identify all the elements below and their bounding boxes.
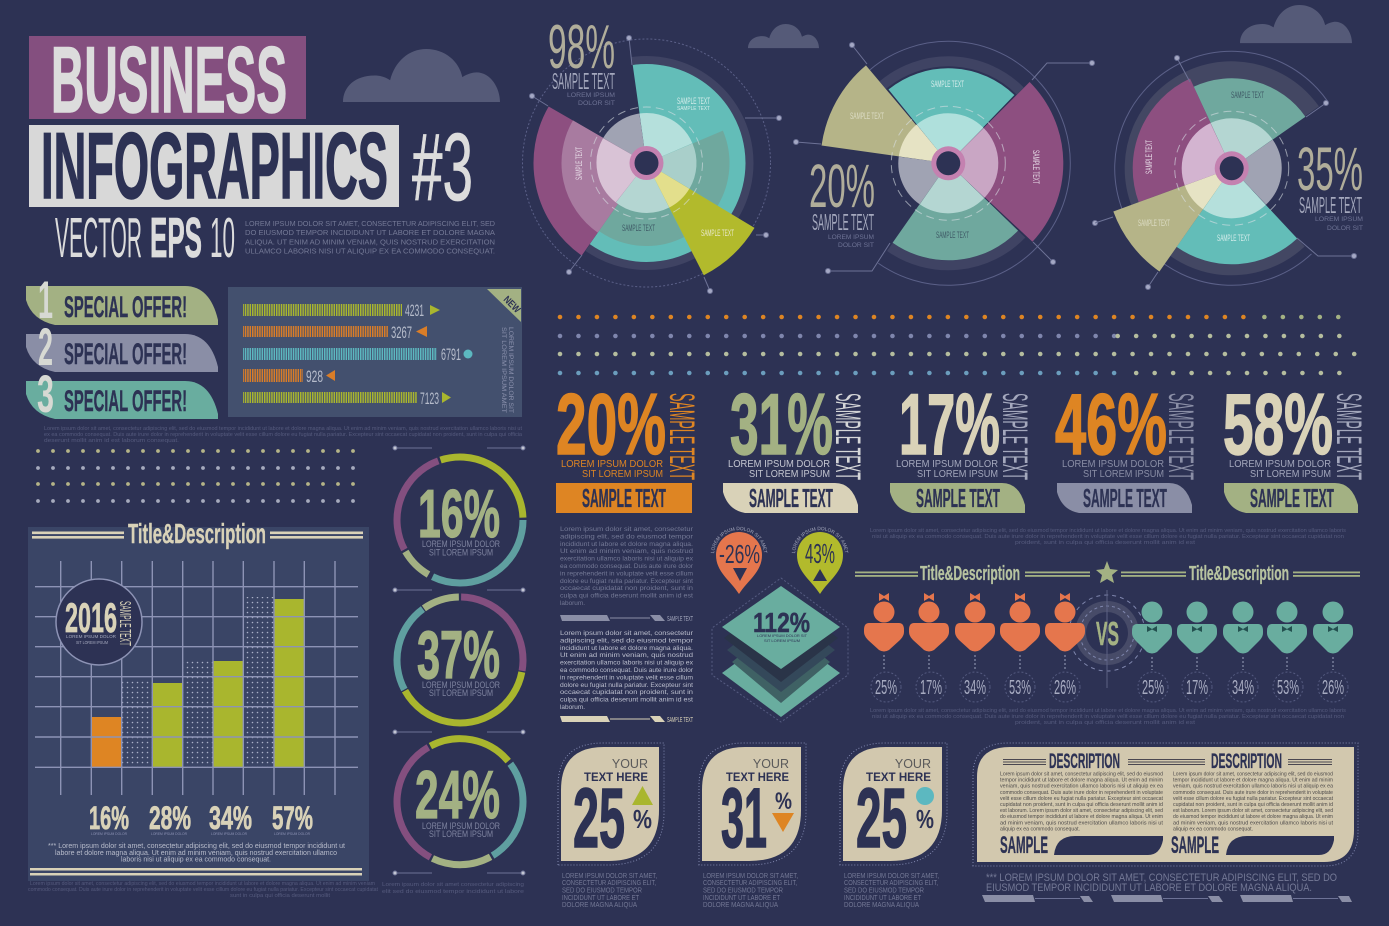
- paragraph block 1: occaecat cupidatat non proident, sunt in: [560, 585, 694, 592]
- offer 3: 3: [37, 365, 54, 424]
- intro text: DO EIUSMOD TEMPOR INCIDIDUNT UT LABORE ET DOLORE MAGNA: [245, 230, 495, 237]
- caption card 3: [844, 873, 939, 909]
- figure 1: [864, 593, 904, 652]
- card 25% triangle: [558, 743, 664, 865]
- text: SAMPLE TEXT: [1329, 393, 1368, 480]
- paragraph block 2: culpa qui officia deserunt mollit anim id est: [560, 697, 693, 704]
- stat 20%: SIT LOREM IPSUM: [582, 469, 663, 480]
- year badge: 2016: [65, 594, 117, 641]
- bar 4231: 4231: [405, 301, 424, 320]
- pie 1 headline: LOREM IPSUM: [567, 92, 615, 99]
- special offers list: [26, 271, 218, 424]
- new corner badge: [487, 289, 522, 322]
- caption under stats: [870, 528, 1347, 546]
- ring chart 16%: SIT LOREM IPSUM: [429, 548, 493, 558]
- text: SAMPLE TEXT: [995, 393, 1034, 480]
- pie chart 35%: [1066, 3, 1389, 334]
- caption card 2: LOREM IPSUM DOLOR SIT AMET,: [703, 873, 798, 880]
- stat 31%: SIT LOREM IPSUM: [749, 469, 830, 480]
- caption card 2: DOLORE MAGNA ALIQUA: [703, 902, 778, 909]
- figure percentages: 34%: [964, 677, 986, 699]
- figure 10: [1313, 602, 1353, 654]
- year badge: SAMPLE TEXT: [116, 601, 133, 646]
- caption card 1: [562, 873, 657, 909]
- paragraph block 2: dolore eu fugiat nulla pariatur. Excepteur sint: [560, 682, 693, 689]
- pie 1 segment labels: SAMPLE TEXT: [574, 147, 584, 180]
- dot grid left: [38, 451, 365, 501]
- bar 7123: 7123: [420, 389, 439, 408]
- versus heading: Title&Description: [920, 563, 1020, 585]
- pie 3 segment labels: SAMPLE TEXT: [1138, 218, 1170, 228]
- percent labels: [89, 800, 313, 836]
- pie 3 headline: DOLOR SIT: [1327, 225, 1363, 232]
- caption under offers: Lorem ipsum dolor sit amet, consectetur adipiscing elit, sed do eiusmod tempor incididunt ut labore et dolore magna aliqua. Ut enim ad minim veniam, quis nostrud exercitation ullamco laboris nisi ut: [44, 426, 523, 432]
- percent sublabels: LOREM IPSUM DOLOR: [151, 832, 187, 836]
- description column 1: Lorem ipsum dolor sit amet, consectetur adipiscing elit, sed do eiusmod: [1000, 772, 1163, 778]
- note text: labore et dolore magna aliqua. Ut enim ad minim veniam, quis nostrud exercitation ullamco: [55, 850, 337, 857]
- offer 1: 1: [38, 271, 53, 330]
- offer 1: [26, 271, 218, 330]
- teal figures: [1132, 602, 1353, 654]
- description column 2: velit esse cillum dolore eu fugiat nulla pariatur. Excepteur sint occaecat: [1173, 796, 1333, 802]
- paragraph block 1: exercitation ullamco laboris nisi ut aliquip ex: [560, 556, 694, 563]
- panel: description: [973, 743, 1358, 866]
- figure percentages: 17%: [920, 677, 942, 699]
- note text: [48, 843, 345, 864]
- title block: INFOGRAPHICS: [41, 113, 388, 218]
- year badge: SIT LOREM IPSUM: [76, 640, 108, 645]
- stat 17%: 17%: [899, 377, 1000, 473]
- pie 2 segment labels: SAMPLE TEXT: [936, 230, 969, 240]
- pin -26%: LOREM IPSUM DOLOR SIT AMET: [710, 526, 768, 554]
- description column 2: tempor incididunt ut labore et dolore magna aliqua. Ut enim ad minim: [1173, 778, 1333, 784]
- pie chart 20%: SAMPLE TEXT: [812, 209, 874, 235]
- description column 1: ad minim veniam, quis nostrud exercitation ullamco laboris nisi ut: [1000, 820, 1163, 826]
- pie 2 headline: DOLOR SIT: [838, 242, 874, 249]
- cloud right: [1240, 5, 1352, 43]
- note under description: [986, 872, 1337, 894]
- pie 2 segment labels: SAMPLE TEXT: [931, 79, 964, 89]
- offer 2: 2: [38, 318, 53, 377]
- card 31% triangle: 31: [721, 771, 767, 865]
- divider 1: [560, 614, 693, 623]
- stat 46%: SAMPLE TEXT: [1083, 483, 1167, 513]
- vertical panel caption: SIT LOREM IPSUM AMET: [500, 327, 507, 413]
- intro text: ULLAMCO LABORIS NISI UT ALIQUIP EX EA COMMODO CONSEQUAT.: [245, 248, 495, 256]
- stat 58%: LOREM IPSUM DOLOR: [1229, 459, 1331, 470]
- pin 43%: 43%: [805, 538, 835, 569]
- percent labels: 34%: [209, 800, 252, 836]
- pie 2 headline: [809, 152, 875, 249]
- pie 1 segment labels: SAMPLE TEXT: [677, 96, 710, 106]
- sample labels and pills: SAMPLE: [1171, 832, 1219, 859]
- stat 17%: SIT LOREM IPSUM: [917, 469, 998, 480]
- caption under bar chart: commodo consequat. Duis aute irure dolor in reprehenderit in voluptate velit esse cillum dolore eu fugiat nulla pariatur. Excepteur sint occaecat cupidatat: [28, 887, 379, 893]
- pie chart 98%: SAMPLE TEXT: [552, 68, 615, 94]
- stat 17%: [890, 377, 1034, 513]
- dotted columns: [122, 597, 274, 767]
- stat 31%: 31%: [730, 377, 833, 473]
- description column 1: veniam, quis nostrud exercitation ullamco laboris nisi ut aliquip ex ea: [1000, 784, 1164, 790]
- title block: 10: [210, 206, 235, 270]
- stat 46%: 46%: [1055, 377, 1167, 473]
- stat 58%: SIT LOREM IPSUM: [1250, 469, 1331, 480]
- pie 1 segment labels: SAMPLE TEXT: [677, 106, 710, 112]
- title: number: #3: [412, 114, 473, 221]
- caption under offers: deserunt mollit anim id est laborum consequat.: [44, 438, 179, 444]
- caption under stats: Lorem ipsum dolor sit amet, consectetur adipiscing elit, sed do eiusmod tempor incididunt ut labore et dolore magna aliqua. Ut enim ad minim veniam, quis nostrud exercitation ullamco laboris: [870, 528, 1347, 534]
- caption card 1: SED DO EIUSMOD TEMPOR: [562, 888, 642, 894]
- subtitle: EPS: [150, 206, 202, 270]
- description column 2: commodo consequat. Duis aute irure dolor in reprehenderit in voluptate: [1173, 790, 1333, 796]
- chart title: Title&Description: [128, 518, 266, 549]
- card 31% triangle: [699, 743, 806, 865]
- percent sublabels: LOREM IPSUM DOLOR: [91, 832, 127, 836]
- intro text: LOREM IPSUM DOLOR SIT AMET, CONSECTETUR ADIPISCING ELIT, SED: [245, 221, 495, 228]
- ring chart 37%: 37%: [417, 617, 500, 693]
- figure percentages: 26%: [1322, 677, 1344, 699]
- card 25% triangle: TEXT HERE: [584, 772, 648, 784]
- figure 3: [955, 593, 995, 652]
- year badge: [56, 579, 142, 665]
- figure percentages: 53%: [1009, 677, 1031, 699]
- description stripes: [1003, 759, 1332, 765]
- ring chart 24%: LOREM IPSUM DOLOR: [422, 821, 500, 831]
- figure 4: [1000, 593, 1040, 652]
- pie 2 headline: LOREM IPSUM: [828, 234, 874, 241]
- caption card 2: SED DO EIUSMOD TEMPOR: [703, 888, 783, 894]
- description headings: [1049, 750, 1282, 773]
- pie 2 segment labels: [850, 79, 1041, 240]
- pie 2 headline: 20%: [809, 152, 875, 220]
- panel: description: DESCRIPTION: [1211, 750, 1282, 773]
- ring chart 16%: 16%: [418, 476, 500, 552]
- card 31% triangle: YOUR: [753, 757, 789, 771]
- subtitle: VECTOR: [55, 206, 142, 270]
- stat 17%: SAMPLE TEXT: [916, 483, 1000, 513]
- note under description: EIUSMOD TEMPOR INCIDIDUNT UT LABORE ET DOLORE MAGNA ALIQUA.: [986, 882, 1312, 894]
- caption card 3: LOREM IPSUM DOLOR SIT AMET,: [844, 873, 939, 880]
- description headings: DESCRIPTION: [1049, 750, 1120, 773]
- bar 7123: [243, 389, 451, 408]
- caption card 3: DOLORE MAGNA ALIQUA: [844, 902, 919, 909]
- pin -26%: -26%: [719, 539, 760, 569]
- bar 3267: 3267: [391, 323, 412, 342]
- percent sublabels: LOREM IPSUM DOLOR: [211, 832, 247, 836]
- figure percentages: 26%: [1054, 677, 1076, 699]
- value bars: [91, 599, 304, 767]
- title: business: BUSINESS: [51, 27, 287, 132]
- description column 2: est laborum. Lorem ipsum dolor sit amet, consectetur adipiscing elit, sed: [1173, 808, 1333, 814]
- bottom dividers: [982, 895, 1352, 902]
- paragraph block 2: Lorem ipsum dolor sit amet, consectetur: [560, 630, 693, 637]
- divider 2: SAMPLE TEXT: [667, 715, 693, 724]
- VS badge: [1069, 590, 1145, 688]
- caption under bar chart: [28, 881, 379, 899]
- panel: bar chart: [28, 518, 369, 881]
- card 25% circle: %: [916, 804, 934, 834]
- description column 2: do eiusmod tempor incididunt ut labore et dolore magna aliqua. Ut enim: [1173, 814, 1333, 820]
- bar 3267: [243, 323, 427, 342]
- figure percentages: 53%: [1277, 677, 1299, 699]
- figure percentages: 34%: [1232, 677, 1254, 699]
- cloud middle: [748, 24, 819, 48]
- figure 9: [1267, 602, 1307, 654]
- caption card 2: CONSECTETUR ADIPISCING ELIT,: [703, 880, 797, 887]
- paragraph block 1: dolore eu fugiat nulla pariatur. Excepteur sint: [560, 578, 693, 585]
- percent labels: 28%: [149, 800, 191, 836]
- dotted rows top right: [560, 317, 1356, 373]
- paragraph block 1: [560, 526, 694, 607]
- description column 1: do eiusmod tempor incididunt ut labore et dolore magna aliqua. Ut enim: [1000, 814, 1163, 820]
- note text: *** Lorem ipsum dolor sit amet, consectetur adipiscing elit, sed do eiusmod tempor incididunt ut: [48, 843, 345, 850]
- title: business: [29, 27, 306, 132]
- card 25% circle: 25: [856, 771, 907, 865]
- intro text: ALIQUA. UT ENIM AD MINIM VENIAM, QUIS NOSTRUD EXERCITATION: [245, 240, 495, 246]
- card 31% triangle: TEXT HERE: [726, 772, 789, 784]
- icon: star: [1096, 561, 1118, 583]
- paragraph block 2: adipiscing elit, sed do eiusmod tempor: [560, 637, 693, 644]
- paragraph block 2: laborum.: [560, 704, 585, 711]
- caption under stats: nisi ut aliquip ex ea commodo consequat. Duis aute irure dolor in reprehenderit in voluptate velit esse cillum dolore eu fugiat nulla pariatur. Excepteur sint occaecat cupidatat non: [872, 534, 1344, 540]
- stat 58%: [1223, 377, 1368, 513]
- text: SAMPLE TEXT: [662, 393, 701, 480]
- figure percentages: [871, 655, 1348, 702]
- figure 7: [1177, 602, 1217, 654]
- pin 43%: [792, 526, 848, 594]
- paragraph block 1: culpa qui officia deserunt mollit anim id est: [560, 593, 693, 600]
- versus heading: [855, 561, 1360, 585]
- stat 20%: LOREM IPSUM DOLOR: [561, 459, 663, 470]
- caption card 1: CONSECTETUR ADIPISCING ELIT,: [562, 880, 656, 887]
- VS badge: VS: [1096, 615, 1119, 652]
- pie 1 headline: [548, 13, 615, 107]
- bar 4231: [243, 301, 440, 320]
- divider 1: SAMPLE TEXT: [667, 614, 693, 623]
- ring chart 24%: SIT LOREM IPSUM: [429, 829, 493, 839]
- pie 3 segment labels: [1138, 90, 1264, 243]
- paragraph block 2: incididunt ut labore et dolore magna aliqua.: [560, 645, 693, 652]
- stacked diamonds 112%: 112%: [753, 607, 810, 638]
- stat 46%: LOREM IPSUM DOLOR: [1062, 459, 1164, 470]
- bar 928: 928: [306, 367, 323, 386]
- paragraph block 1: Lorem ipsum dolor sit amet, consectetur: [560, 526, 693, 533]
- caption card 3: SED DO EIUSMOD TEMPOR: [844, 888, 924, 894]
- pie 3 headline: [1297, 135, 1363, 232]
- offer 2: [26, 318, 218, 377]
- figure percentages: 25%: [875, 677, 897, 699]
- offer 3: SPECIAL OFFER!: [64, 385, 187, 418]
- year badge: LOREM IPSUM DOLOR: [66, 634, 117, 639]
- caption under rings: Lorem ipsum dolor sit amet consectetur adipiscing: [382, 882, 524, 888]
- pie 3 headline: LOREM IPSUM: [1315, 216, 1363, 223]
- pie 2 leader lines: [794, 42, 1098, 274]
- description column 1: [1000, 772, 1164, 832]
- pie 2 segment labels: SAMPLE TEXT: [1031, 150, 1041, 184]
- percent sublabels: LOREM IPSUM DOLOR: [274, 832, 310, 836]
- paragraph block 2: [560, 630, 694, 711]
- pie 3 leader lines: [1095, 56, 1356, 290]
- figure 6: [1132, 602, 1172, 654]
- description column 1: aliquip ex ea commodo consequat.: [1000, 826, 1080, 832]
- percent labels: 57%: [272, 800, 313, 836]
- text: SAMPLE TEXT: [1161, 393, 1200, 480]
- ring chart 24%: 24%: [415, 757, 500, 833]
- paragraph block 2: in reprehenderit in voluptate velit esse cillum: [560, 674, 693, 681]
- description column 2: ad minim veniam, quis nostrud exercitation ullamco laboris nisi ut: [1173, 820, 1333, 826]
- caption card 3: CONSECTETUR ADIPISCING ELIT,: [844, 880, 938, 887]
- figure 5: [1045, 593, 1085, 652]
- stacked diamonds 112%: SIT LOREM IPSUM: [764, 638, 800, 643]
- description column 2: aliquip ex ea commodo consequat.: [1173, 826, 1253, 832]
- title block: [29, 27, 495, 270]
- paragraph block 2: Ut enim ad minim veniam, quis nostrud: [560, 652, 694, 659]
- caption under figures: Lorem ipsum dolor sit amet, consectetur adipiscing elit, sed do eiusmod tempor incididunt ut labore et dolore magna aliqua. Ut enim ad minim veniam, quis nostrud exercitation ullamco laboris: [870, 708, 1347, 714]
- description column 2: cupidatat non proident, sunt in culpa qui officia deserunt mollit anim id: [1173, 802, 1333, 808]
- caption under stats: proident, sunt in culpa qui officia deserunt mollit anim id est: [1015, 540, 1196, 546]
- versus heading: Title&Description: [1189, 563, 1289, 585]
- note text: laboris nisi ut aliquip ex ea commodo consequat.: [121, 856, 271, 864]
- title: infographics: [29, 113, 399, 218]
- sample labels and pills: SAMPLE: [1000, 832, 1048, 859]
- caption under bar chart: sunt in culpa qui officia deserunt mollit: [230, 893, 331, 899]
- card 25% triangle: 25: [573, 771, 625, 865]
- caption card 2: [703, 873, 798, 909]
- stat 46%: SIT LOREM IPSUM: [1083, 469, 1164, 480]
- description column 1: cupidatat non proident, sunt in culpa qui officia deserunt mollit anim id: [1000, 802, 1163, 808]
- description column 1: est laborum. Lorem ipsum dolor sit amet, consectetur adipiscing elit, sed: [1000, 808, 1163, 814]
- intro text: [245, 221, 495, 256]
- paragraph block 1: Ut enim ad minim veniam, quis nostrud: [560, 548, 694, 555]
- description column 1: tempor incididunt ut labore et dolore magna aliqua. Ut enim ad minim: [1000, 778, 1163, 784]
- caption under figures: nisi ut aliquip ex ea commodo consequat. Duis aute irure dolor in reprehenderit in voluptate velit esse cillum dolore eu fugiat nulla pariatur. Excepteur sint occaecat cupidatat non: [872, 714, 1344, 720]
- pie chart 98%: [522, 13, 782, 294]
- pin -26%: [710, 526, 768, 594]
- stat 31%: SAMPLE TEXT: [749, 483, 833, 513]
- description column 2: Lorem ipsum dolor sit amet, consectetur adipiscing elit, sed do eiusmod: [1173, 772, 1333, 778]
- pie 1 segment labels: [574, 96, 734, 238]
- pie 3 segment labels: SAMPLE TEXT: [1217, 233, 1250, 243]
- ring chart 37%: SIT LOREM IPSUM: [429, 688, 493, 698]
- pie 1 headline: DOLOR SIT: [578, 100, 615, 107]
- ring chart 37%: [372, 572, 548, 748]
- text: SAMPLE TEXT: [828, 393, 867, 480]
- card 25% triangle: YOUR: [612, 757, 648, 771]
- description column 2: veniam, quis nostrud exercitation ullamco laboris nisi ut aliquip ex ea: [1173, 784, 1334, 790]
- figure percentages: 25%: [1142, 677, 1164, 699]
- paragraph block 2: occaecat cupidatat non proident, sunt in: [560, 689, 694, 696]
- caption under figures: [870, 708, 1347, 726]
- panel: striped bars: [228, 287, 522, 417]
- pie 1 leader lines: [530, 36, 782, 294]
- vertical panel caption: LOREM IPSUM DOLOR SIT: [507, 327, 514, 413]
- ring chart 16%: [374, 434, 546, 606]
- caption card 1: INCIDIDUNT UT LABORE ET: [562, 895, 640, 902]
- paragraph block 1: ea commodo consequat. Duis aute irure dolor: [560, 563, 693, 570]
- figure 8: [1223, 602, 1263, 654]
- paragraph block 2: exercitation ullamco laboris nisi ut aliquip ex: [560, 660, 694, 667]
- stacked diamonds 112%: [712, 578, 848, 722]
- stat 20%: 20%: [556, 377, 666, 473]
- caption under offers: ex ea commodo consequat. Duis aute irure dolor in reprehenderit in voluptate velit esse cillum dolore eu fugiat nulla pariatur. Excepteur sint occaecat cupidatat non proident, sunt in culpa qui officia: [44, 432, 522, 438]
- pie 1 segment labels: SAMPLE TEXT: [701, 228, 734, 238]
- stat 17%: LOREM IPSUM DOLOR: [896, 459, 998, 470]
- chart title: [32, 518, 363, 549]
- stat 20%: SAMPLE TEXT: [582, 483, 666, 513]
- bar 928: [243, 367, 335, 386]
- pie 1 headline: 98%: [548, 13, 615, 82]
- paragraph block 2: ea commodo consequat. Duis aute irure dolor: [560, 667, 693, 674]
- stat 31%: LOREM IPSUM DOLOR: [728, 459, 830, 470]
- card 25% circle: TEXT HERE: [866, 772, 931, 784]
- ring chart 37%: LOREM IPSUM DOLOR: [422, 680, 500, 690]
- caption under bar chart: Lorem ipsum dolor sit amet, consectetur adipiscing elit, sed do eiusmod tempor incididunt ut labore et dolore magna aliqua. Ut enim ad minim veniam: [30, 881, 375, 887]
- orange figures: [864, 593, 1085, 652]
- sample labels and pills: [1000, 832, 1334, 859]
- caption card 2: INCIDIDUNT UT LABORE ET: [703, 895, 781, 902]
- ring chart 24%: [372, 713, 548, 890]
- note under description: *** LOREM IPSUM DOLOR SIT AMET, CONSECTETUR ADIPISCING ELIT, SED DO: [986, 872, 1337, 884]
- caption under figures: proident, sunt in culpa qui officia deserunt mollit anim id est: [1015, 720, 1196, 726]
- card captions: [562, 873, 939, 909]
- card 25% circle: YOUR: [895, 757, 931, 771]
- stat 20%: [556, 377, 701, 513]
- paragraph block 1: in reprehenderit in voluptate velit esse cillum: [560, 570, 693, 577]
- pie 3 segment labels: SAMPLE TEXT: [1144, 140, 1154, 174]
- cloud left: [343, 49, 500, 102]
- stat 46%: [1055, 377, 1200, 513]
- pie 3 segment labels: SAMPLE TEXT: [1231, 90, 1264, 100]
- bar 6791: [243, 345, 472, 364]
- caption under offers: [44, 426, 523, 444]
- description column 1: commodo consequat. Duis aute irure dolor in reprehenderit in voluptate: [1000, 790, 1163, 796]
- divider 2: [560, 715, 693, 724]
- paragraph block 1: laborum.: [560, 600, 585, 607]
- caption under rings: [382, 882, 524, 895]
- offer 1: SPECIAL OFFER!: [64, 291, 187, 324]
- paragraph block 1: adipiscing elit, sed do eiusmod tempor: [560, 533, 693, 540]
- paragraph block 1: incididunt ut labore et dolore magna aliqua.: [560, 541, 693, 548]
- figure percentages: 17%: [1186, 677, 1208, 699]
- pie 1 segment labels: SAMPLE TEXT: [622, 223, 655, 233]
- caption under rings: elit sed do eiusmod tempor incididunt ut labore: [382, 889, 524, 895]
- caption card 1: LOREM IPSUM DOLOR SIT AMET,: [562, 873, 657, 880]
- stat 31%: [723, 377, 867, 513]
- card 25% circle: [840, 743, 947, 865]
- figure 2: [909, 593, 949, 652]
- description column 1: velit esse cillum dolore eu fugiat nulla pariatur. Excepteur sint occaecat: [1000, 796, 1163, 802]
- card 25% triangle: %: [633, 804, 652, 834]
- new corner badge: NEW: [501, 294, 522, 316]
- percent labels: 16%: [89, 800, 129, 836]
- stacked diamonds 112%: LOREM IPSUM DOLOR SIT: [757, 633, 808, 638]
- pie 2 segment labels: SAMPLE TEXT: [850, 111, 884, 121]
- pin 43%: LOREM IPSUM DOLOR SIT AMET: [792, 526, 848, 554]
- card 31% triangle: %: [775, 788, 792, 815]
- vertical panel caption: [500, 327, 514, 413]
- ring chart 16%: LOREM IPSUM DOLOR: [422, 539, 500, 549]
- bar 6791: 6791: [441, 345, 461, 364]
- offer 3: [26, 365, 218, 424]
- pie chart 20%: [776, 0, 1120, 335]
- percent sublabels: [91, 832, 310, 836]
- ring separators: [393, 446, 525, 875]
- description column 2: [1173, 772, 1334, 832]
- caption card 3: INCIDIDUNT UT LABORE ET: [844, 895, 922, 902]
- offer 2: SPECIAL OFFER!: [64, 338, 187, 371]
- caption card 1: DOLORE MAGNA ALIQUA: [562, 902, 637, 909]
